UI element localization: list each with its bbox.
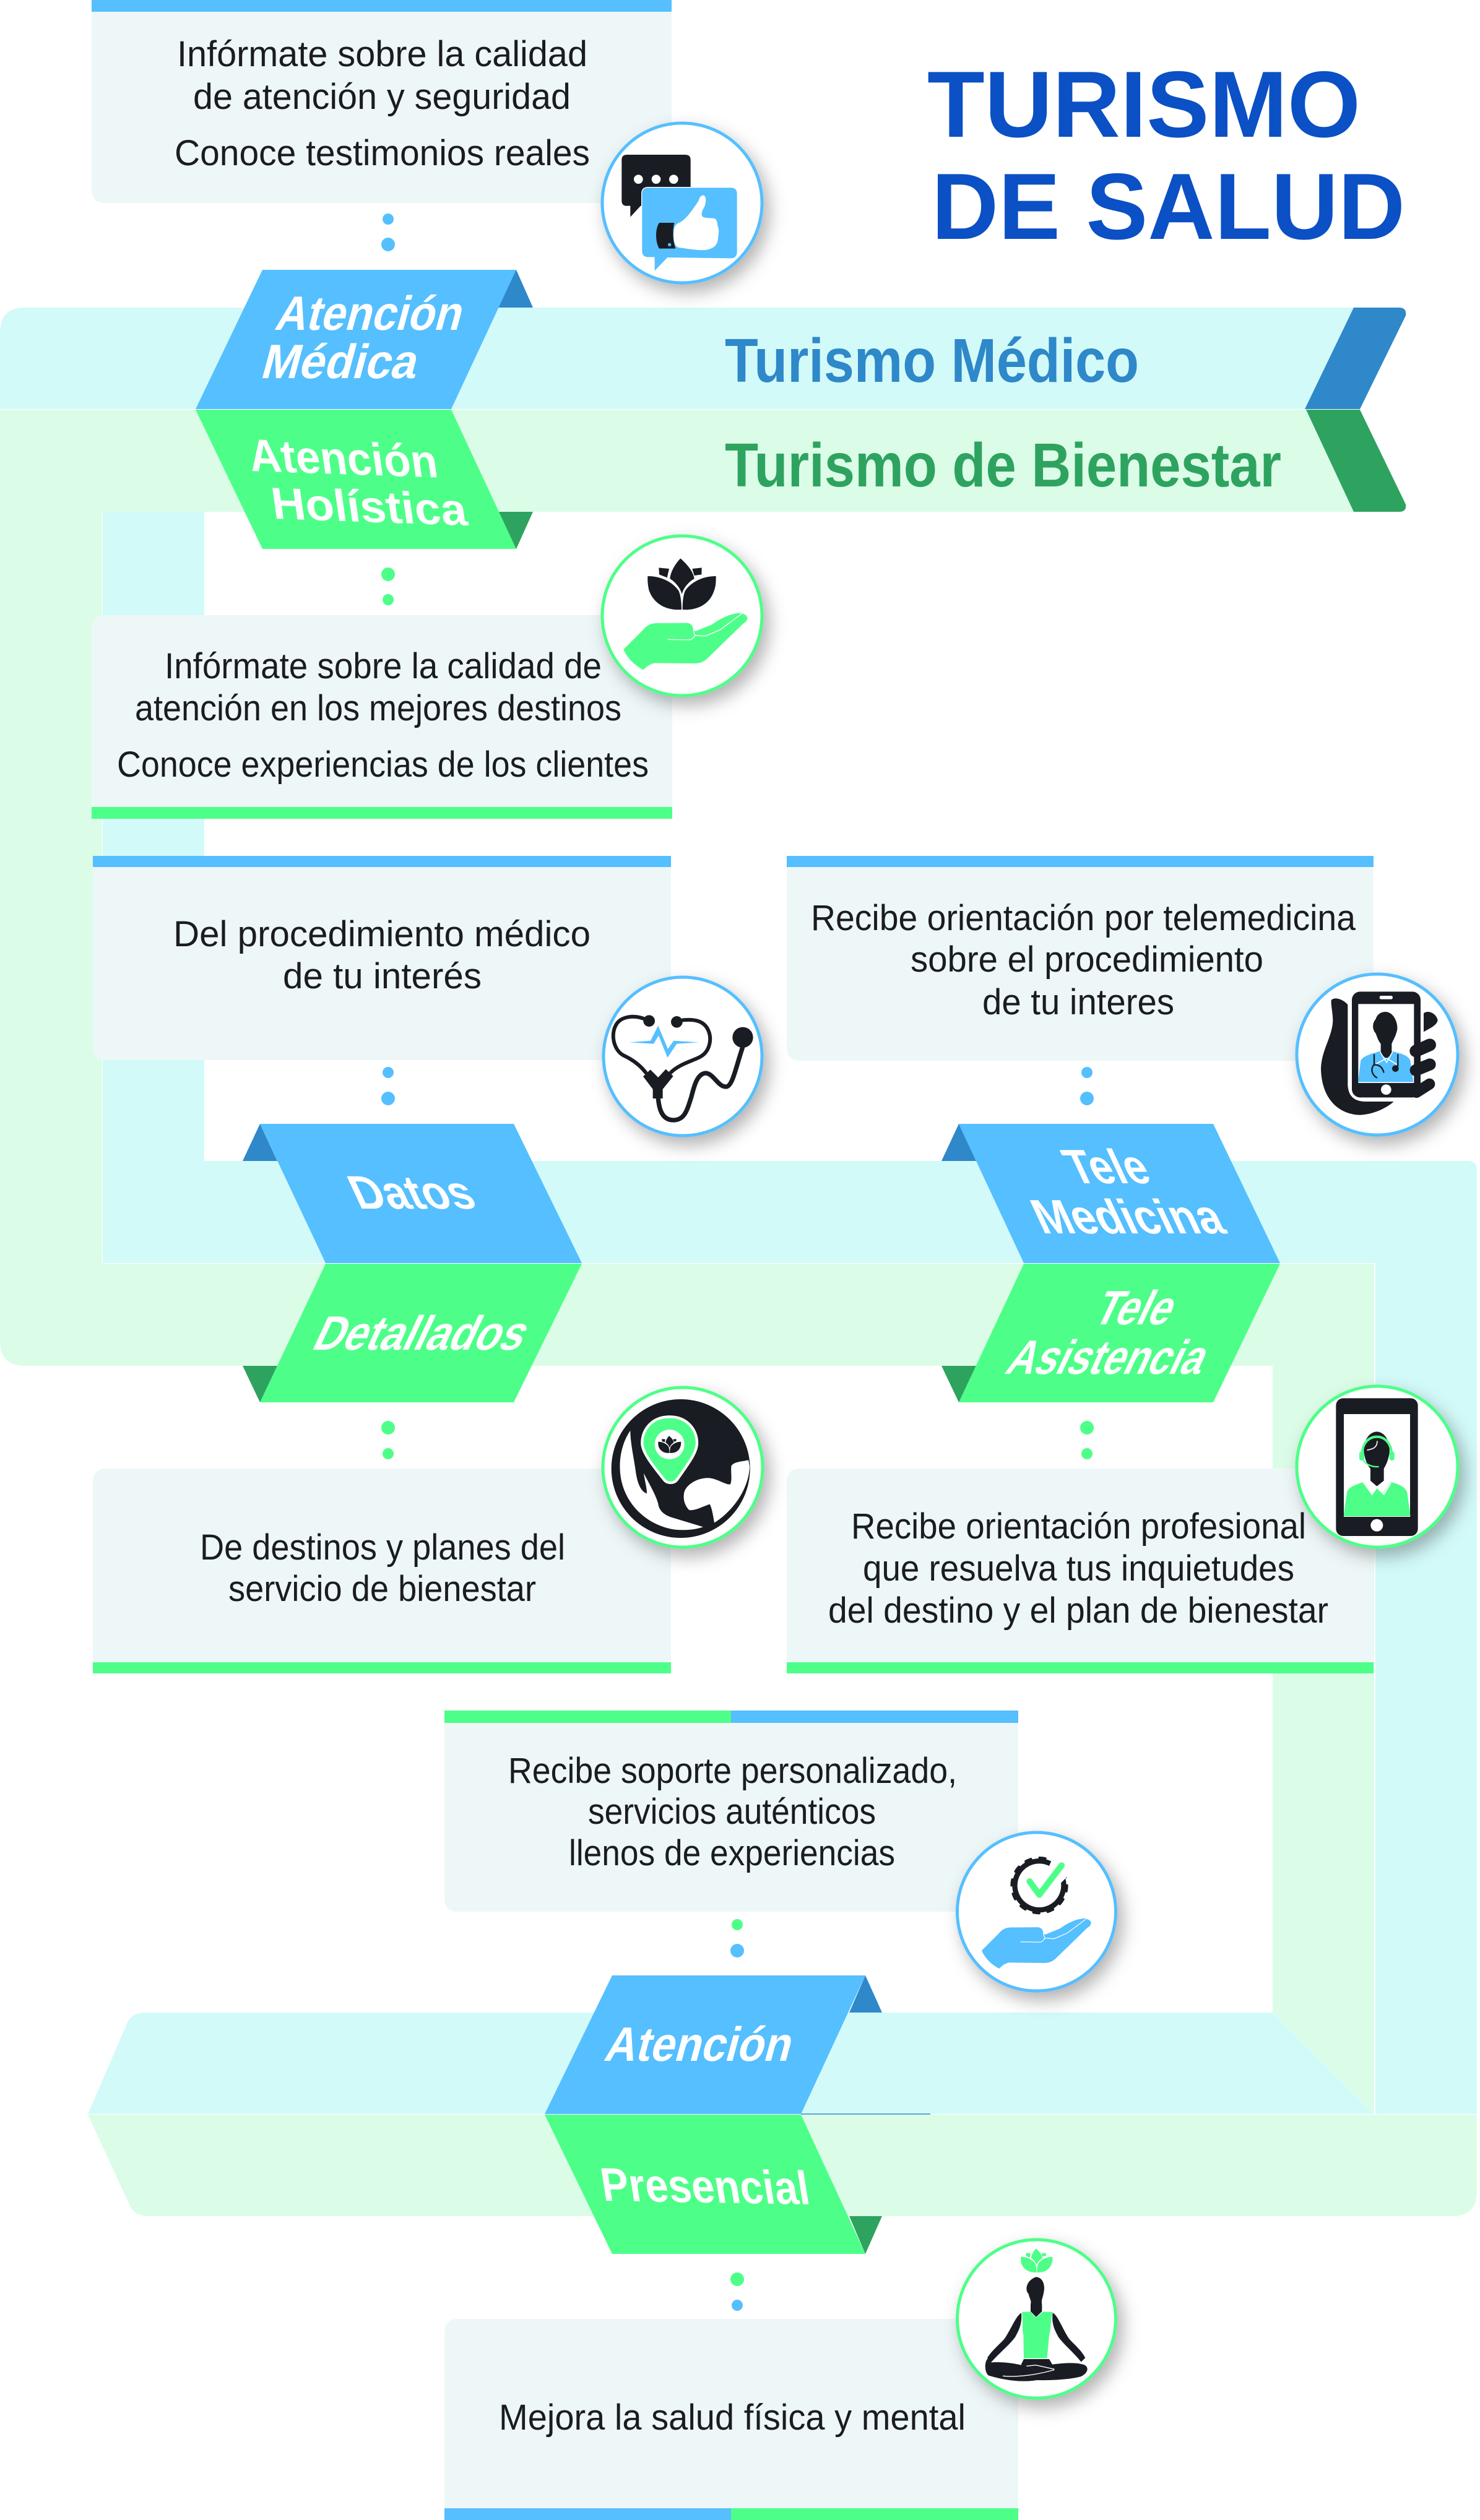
panel: destinos y planes: servicio de bienestar bbox=[228, 1569, 536, 1609]
panel: calidad y testimonios: Infórmate sobre la calidad bbox=[177, 34, 587, 74]
ribbon: Datos: Datos bbox=[339, 1167, 484, 1219]
icon: phone with headset agent bbox=[1297, 1386, 1458, 1547]
ribbon: Atención bbox=[545, 1975, 882, 2114]
ribbon: Atención Holística: Atención bbox=[246, 429, 441, 488]
ribbon: Atención Holística bbox=[196, 410, 533, 549]
icon: meditating woman with lotus bbox=[957, 2240, 1115, 2398]
icon: hand holding phone with doctor bbox=[1297, 974, 1458, 1135]
icon: stethoscope with heartbeat bbox=[604, 977, 762, 1136]
icon: badge check over hand bbox=[957, 1832, 1115, 1991]
connector dots bbox=[381, 214, 1094, 2311]
heading: Turismo Médico: Turismo Médico bbox=[725, 326, 1139, 395]
panel: destinos y experiencias: Infórmate sobre la calidad de bbox=[165, 646, 602, 686]
background ribbon: light blue path bbox=[0, 308, 1477, 2114]
panel: procedimiento médico bbox=[93, 856, 671, 1060]
ribbon: Tele Medicina: Tele bbox=[1055, 1141, 1159, 1194]
panel: orientación profesional: que resuelva tus inquietudes bbox=[863, 1548, 1294, 1589]
title bbox=[927, 52, 1405, 259]
panel: soporte personalizado: Recibe soporte personalizado, bbox=[508, 1751, 957, 1791]
ribbon: Presencial bbox=[545, 2115, 882, 2254]
panel: salud física y mental bbox=[444, 2319, 1018, 2520]
ribbon: Atención Médica bbox=[196, 270, 533, 409]
panel: destinos y experiencias bbox=[92, 615, 672, 819]
panel: soporte personalizado: llenos de experiencias bbox=[569, 1833, 895, 1873]
panel: soporte personalizado bbox=[444, 1711, 1018, 1912]
panel: telemedicina: sobre el procedimiento bbox=[911, 939, 1263, 980]
icon: map pin over globe and hand bbox=[603, 1387, 763, 1547]
band end: Turismo de Bienestar bbox=[1306, 410, 1406, 512]
panel: destinos y planes: De destinos y planes del bbox=[200, 1527, 565, 1568]
background ribbon: light green path bbox=[0, 410, 1477, 2216]
panel: telemedicina bbox=[787, 856, 1374, 1061]
ribbon: Tele Asistencia: Tele bbox=[1086, 1282, 1187, 1335]
panel: calidad y testimonios: Conoce testimonios reales bbox=[175, 133, 590, 173]
ribbon: Atención Médica: Atención bbox=[271, 286, 471, 340]
panel: destinos y planes bbox=[93, 1469, 671, 1673]
panel: soporte personalizado: servicios auténticos bbox=[588, 1792, 876, 1832]
panel: destinos y experiencias: atención en los mejores destinos bbox=[135, 688, 621, 728]
panel: destinos y experiencias: Conoce experiencias de los clientes bbox=[117, 744, 649, 785]
ribbon: Atención Médica: Médica bbox=[257, 334, 426, 389]
ribbon: Detallados: Detallados bbox=[305, 1307, 539, 1360]
panel: orientación profesional: Recibe orientación profesional bbox=[851, 1506, 1306, 1547]
icon: speech bubbles with thumbs up bbox=[602, 123, 762, 283]
ribbon: Tele Asistencia bbox=[941, 1264, 1280, 1402]
ribbon: Presencial: Presencial bbox=[597, 2159, 813, 2215]
title: TURISMO bbox=[927, 52, 1361, 157]
band end: Turismo Médico bbox=[1305, 308, 1406, 409]
panel: calidad y testimonios bbox=[92, 0, 672, 203]
panel: orientación profesional bbox=[787, 1469, 1374, 1673]
ribbon: Atención Holística: Holística bbox=[268, 478, 470, 535]
panel: orientación profesional: del destino y el plan de bienestar bbox=[828, 1590, 1328, 1631]
panel: calidad y testimonios: de atención y seguridad bbox=[193, 77, 571, 117]
ribbon: Tele Medicina: Medicina bbox=[1023, 1191, 1234, 1244]
panel: telemedicina: de tu interes bbox=[982, 982, 1174, 1022]
ribbon: Tele Asistencia: Asistencia bbox=[998, 1331, 1219, 1384]
ribbon: Atención: Atención bbox=[600, 2017, 800, 2071]
panel: procedimiento médico: de tu interés bbox=[283, 956, 482, 996]
ribbon: Datos bbox=[243, 1124, 582, 1263]
panel: salud física y mental: Mejora la salud física y mental bbox=[499, 2397, 966, 2438]
icon: lotus over hand bbox=[602, 536, 762, 696]
panel: telemedicina: Recibe orientación por telemedicina bbox=[811, 898, 1356, 938]
ribbon: Detallados bbox=[243, 1264, 582, 1402]
heading: Turismo de Bienestar: Turismo de Bienestar bbox=[725, 431, 1281, 500]
ribbon: Tele Medicina bbox=[941, 1124, 1280, 1263]
panel: procedimiento médico: Del procedimiento médico bbox=[173, 914, 591, 954]
title: DE SALUD bbox=[932, 154, 1405, 259]
